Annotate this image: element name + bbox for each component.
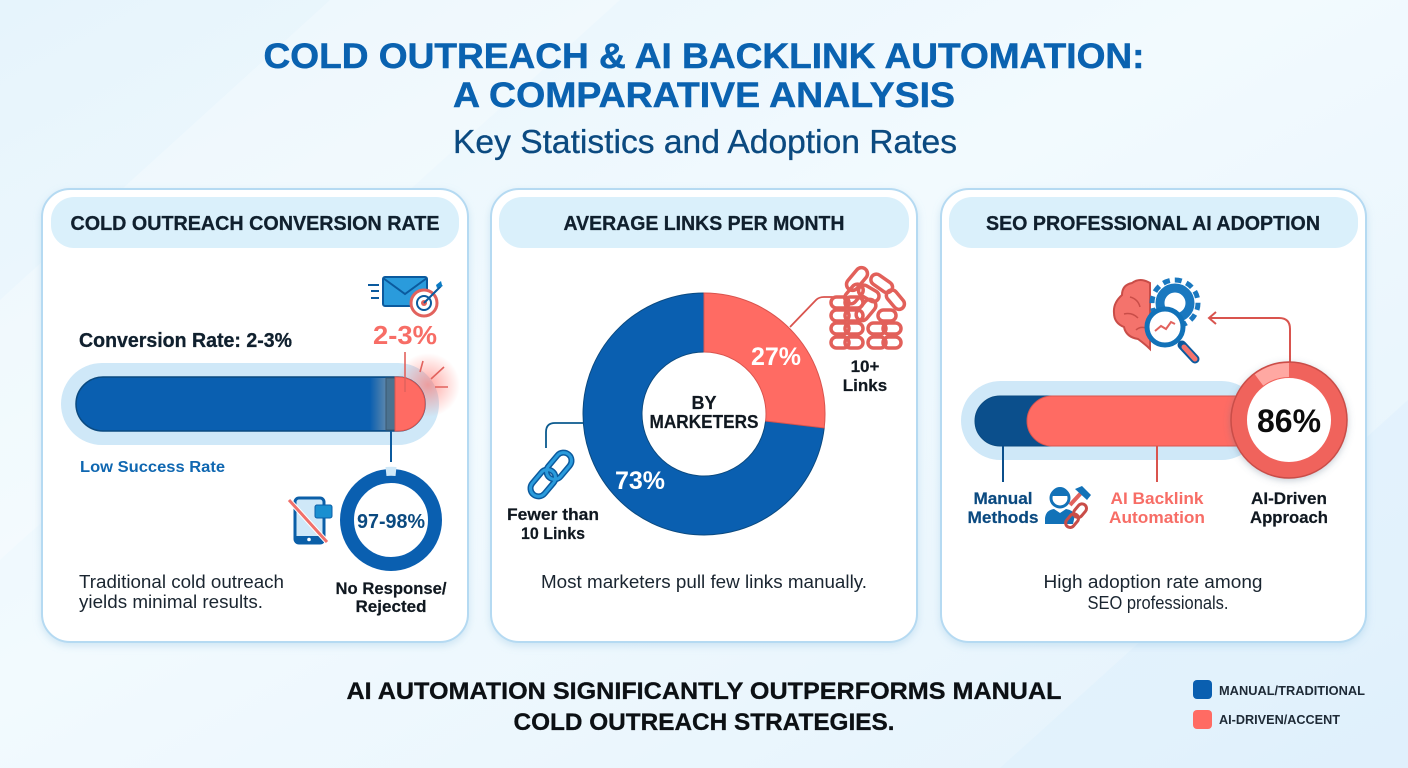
label: fewer than 10 links: Fewer than — [507, 505, 599, 524]
legend: MANUAL/TRADITIONAL — [1219, 684, 1365, 698]
description: Most marketers pull few links manually. — [541, 572, 867, 592]
panel: cold outreach conversion rate — [42, 189, 468, 642]
ring: 86%: 86% — [1257, 403, 1321, 439]
icon: phone crossed out — [289, 498, 332, 543]
donut chart: 73% vs 27%: 27% — [751, 343, 801, 371]
label: conversion rate: Conversion Rate: 2-3% — [79, 330, 292, 352]
label: no response / rejected: Rejected — [356, 597, 426, 616]
panel: average links per month — [491, 189, 917, 642]
progress bar: 2-3% conversion — [61, 353, 460, 445]
label: ai-driven approach: Approach — [1250, 508, 1328, 527]
subtitle: Key Statistics and Adoption Rates — [453, 123, 957, 160]
connector: manual — [1002, 446, 1004, 482]
donut: 97-98% no response: 97-98% — [357, 511, 425, 533]
conclusion — [346, 678, 1062, 736]
label: fewer than 10 links — [507, 505, 599, 543]
callout: 2-3%: 2-3% — [373, 320, 437, 350]
donut: 97-98% no response — [347, 471, 435, 564]
icon: blue chain link — [527, 449, 575, 500]
donut chart: 73% vs 27% — [583, 293, 825, 535]
icon: worker with hammer and link — [1045, 486, 1091, 529]
donut chart: 73% vs 27%: 73% — [615, 467, 665, 495]
panel heading: links per month — [499, 197, 909, 248]
title — [264, 37, 1144, 115]
burst lines — [405, 352, 448, 392]
icon: brain, gear and magnifier — [1114, 280, 1198, 359]
label: no response / rejected — [336, 579, 447, 616]
panel heading: ai adoption — [949, 197, 1358, 248]
label: 10+ links: Links — [843, 376, 887, 395]
label: ai-driven approach: AI-Driven — [1251, 489, 1327, 508]
label: low success rate: Low Success Rate — [80, 459, 225, 476]
label: manual methods: Methods — [968, 508, 1038, 527]
label: manual methods: Manual — [974, 489, 1032, 508]
icon: pile of red chain links — [831, 265, 907, 348]
progress bar: 86% adoption — [961, 381, 1267, 460]
conclusion: AI AUTOMATION SIGNIFICANTLY OUTPERFORMS MANUAL — [346, 678, 1062, 705]
description — [79, 572, 284, 612]
panel heading: conversion rate — [51, 197, 459, 248]
label: manual methods — [968, 489, 1038, 527]
panel heading: conversion rate: COLD OUTREACH CONVERSION RATE — [70, 213, 440, 235]
description: High adoption rate among — [1044, 572, 1262, 592]
title: COLD OUTREACH & AI BACKLINK AUTOMATION: — [264, 37, 1144, 76]
description — [1044, 572, 1262, 613]
legend: AI-DRIVEN/ACCENT — [1219, 713, 1340, 727]
donut chart: 73% vs 27%: BY — [691, 393, 717, 413]
description: SEO professionals. — [1088, 593, 1228, 613]
connector to single link — [546, 423, 583, 448]
label: no response / rejected: No Response/ — [336, 579, 447, 598]
icon: envelope and target — [368, 277, 443, 316]
connector to chain pile — [790, 297, 833, 327]
connector to no response ring — [390, 431, 392, 462]
legend — [1193, 680, 1365, 729]
ring: 86% — [1231, 362, 1347, 478]
donut chart: 73% vs 27%: MARKETERS — [650, 412, 758, 432]
label: ai backlink automation — [1109, 489, 1205, 527]
label: 10+ links — [843, 357, 887, 395]
label: ai backlink automation: Automation — [1109, 508, 1205, 527]
label: ai backlink automation: AI Backlink — [1110, 489, 1204, 508]
panel: seo professional ai adoption — [941, 189, 1366, 642]
panel heading: ai adoption: SEO PROFESSIONAL AI ADOPTION — [986, 213, 1320, 235]
panel heading: links per month: AVERAGE LINKS PER MONTH — [564, 213, 844, 235]
connector: automation — [1156, 446, 1158, 482]
description: Traditional cold outreach — [79, 572, 284, 592]
label: ai-driven approach — [1250, 489, 1328, 527]
description: yields minimal results. — [79, 592, 263, 612]
label: 10+ links: 10+ — [851, 357, 879, 376]
conclusion: COLD OUTREACH STRATEGIES. — [514, 709, 894, 736]
title: A COMPARATIVE ANALYSIS — [453, 76, 955, 115]
arrow: ring to icon — [1209, 312, 1290, 364]
label: fewer than 10 links: 10 Links — [521, 524, 585, 543]
